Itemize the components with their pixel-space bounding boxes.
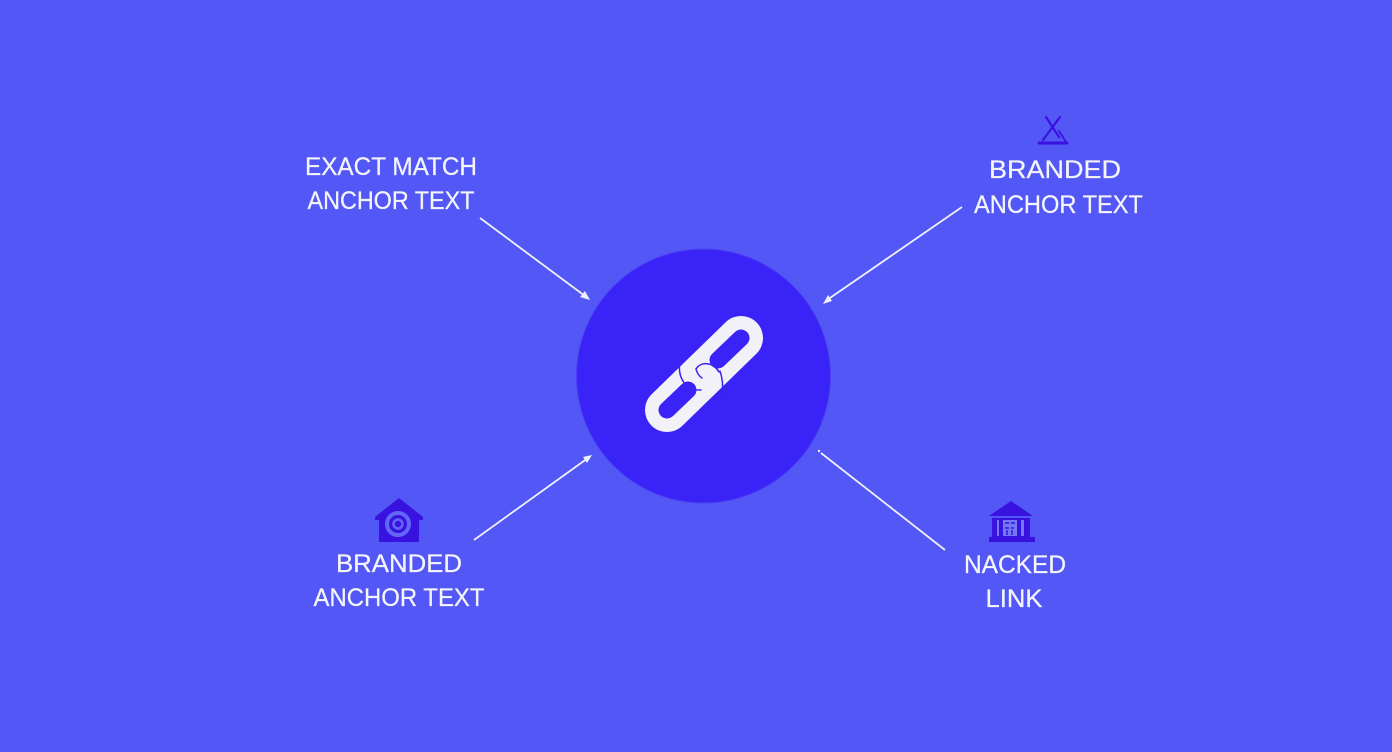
icon: bank building <box>989 501 1035 542</box>
label: branded anchor text, bottom left <box>314 550 484 612</box>
label: branded anchor text, top right <box>974 156 1143 219</box>
label: branded anchor text, bottom left: ANCHOR TEXT <box>314 584 484 612</box>
label: exact match anchor text: ANCHOR TEXT <box>308 187 474 215</box>
arrow: exact match to hub <box>480 218 590 300</box>
arrow: nacked link line from hub <box>818 450 945 550</box>
arrow: branded bottom left to hub <box>474 455 592 540</box>
icon: tent <box>1039 117 1067 143</box>
label: nacked link: LINK <box>986 585 1043 613</box>
label: branded anchor text, bottom left: BRANDED <box>336 550 462 578</box>
label: nacked link: NACKED <box>964 551 1066 579</box>
label: branded anchor text, top right: ANCHOR TEXT <box>974 191 1143 219</box>
icon: house with target <box>375 498 423 542</box>
label: exact match anchor text <box>305 153 477 215</box>
icon: chain link <box>667 338 741 410</box>
label: nacked link <box>964 551 1066 613</box>
label: branded anchor text, top right: BRANDED <box>989 156 1121 184</box>
label: exact match anchor text: EXACT MATCH <box>305 153 477 181</box>
central hub circle <box>576 249 830 503</box>
arrow: branded top right to hub <box>823 207 962 304</box>
